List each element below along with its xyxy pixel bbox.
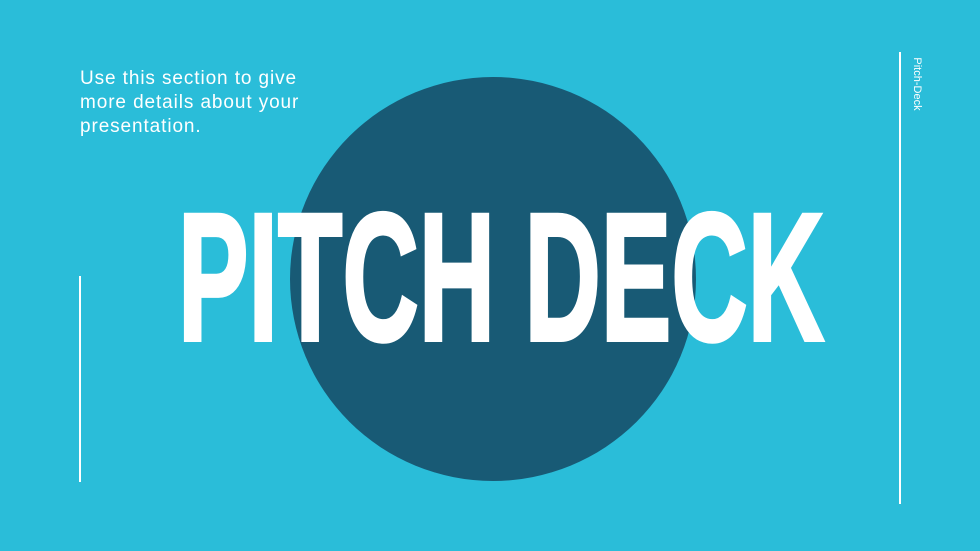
- circle background shape: [290, 77, 696, 481]
- description text block: [80, 68, 299, 137]
- description text block: Use this section to give: [80, 68, 297, 89]
- description text block: more details about your: [80, 92, 299, 113]
- description text block: presentation.: [80, 116, 202, 137]
- left vertical line: [79, 276, 81, 482]
- right vertical line: [899, 52, 901, 504]
- vertical label: Pitch-Deck: [911, 57, 923, 111]
